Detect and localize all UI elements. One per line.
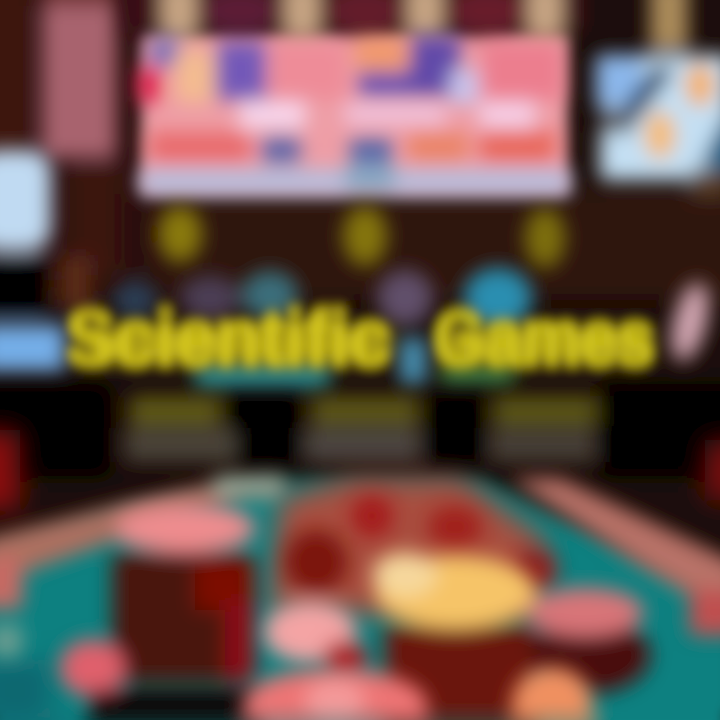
main display screen bbox=[125, 0, 585, 194]
right side highlight bbox=[665, 279, 715, 365]
table edge stripes bbox=[0, 476, 720, 657]
chip bed bbox=[270, 478, 545, 620]
left wall light panels bbox=[0, 150, 92, 371]
title: yellow lettering bbox=[66, 294, 654, 384]
side display screen bbox=[596, 0, 720, 198]
subtitle panels bbox=[0, 385, 720, 475]
glow behind title bbox=[113, 268, 532, 388]
chip stack: left bbox=[60, 504, 260, 720]
screen top row bbox=[125, 0, 585, 40]
chip stack: center bbox=[264, 494, 557, 676]
chip stack: cream top bbox=[373, 553, 650, 720]
title: yellow lettering: Scientific bbox=[66, 294, 390, 382]
table: green felt with pink border bbox=[0, 476, 720, 720]
curtain: top left bbox=[0, 0, 120, 275]
ceiling lamps: yellow bbox=[158, 206, 565, 268]
chip stack: bottom bbox=[243, 667, 592, 720]
screen tiles bbox=[138, 36, 570, 194]
side red glows bbox=[0, 430, 720, 510]
poker chips bbox=[60, 478, 650, 720]
title: yellow lettering: Games bbox=[434, 294, 654, 382]
blue gap between words bbox=[400, 338, 426, 384]
